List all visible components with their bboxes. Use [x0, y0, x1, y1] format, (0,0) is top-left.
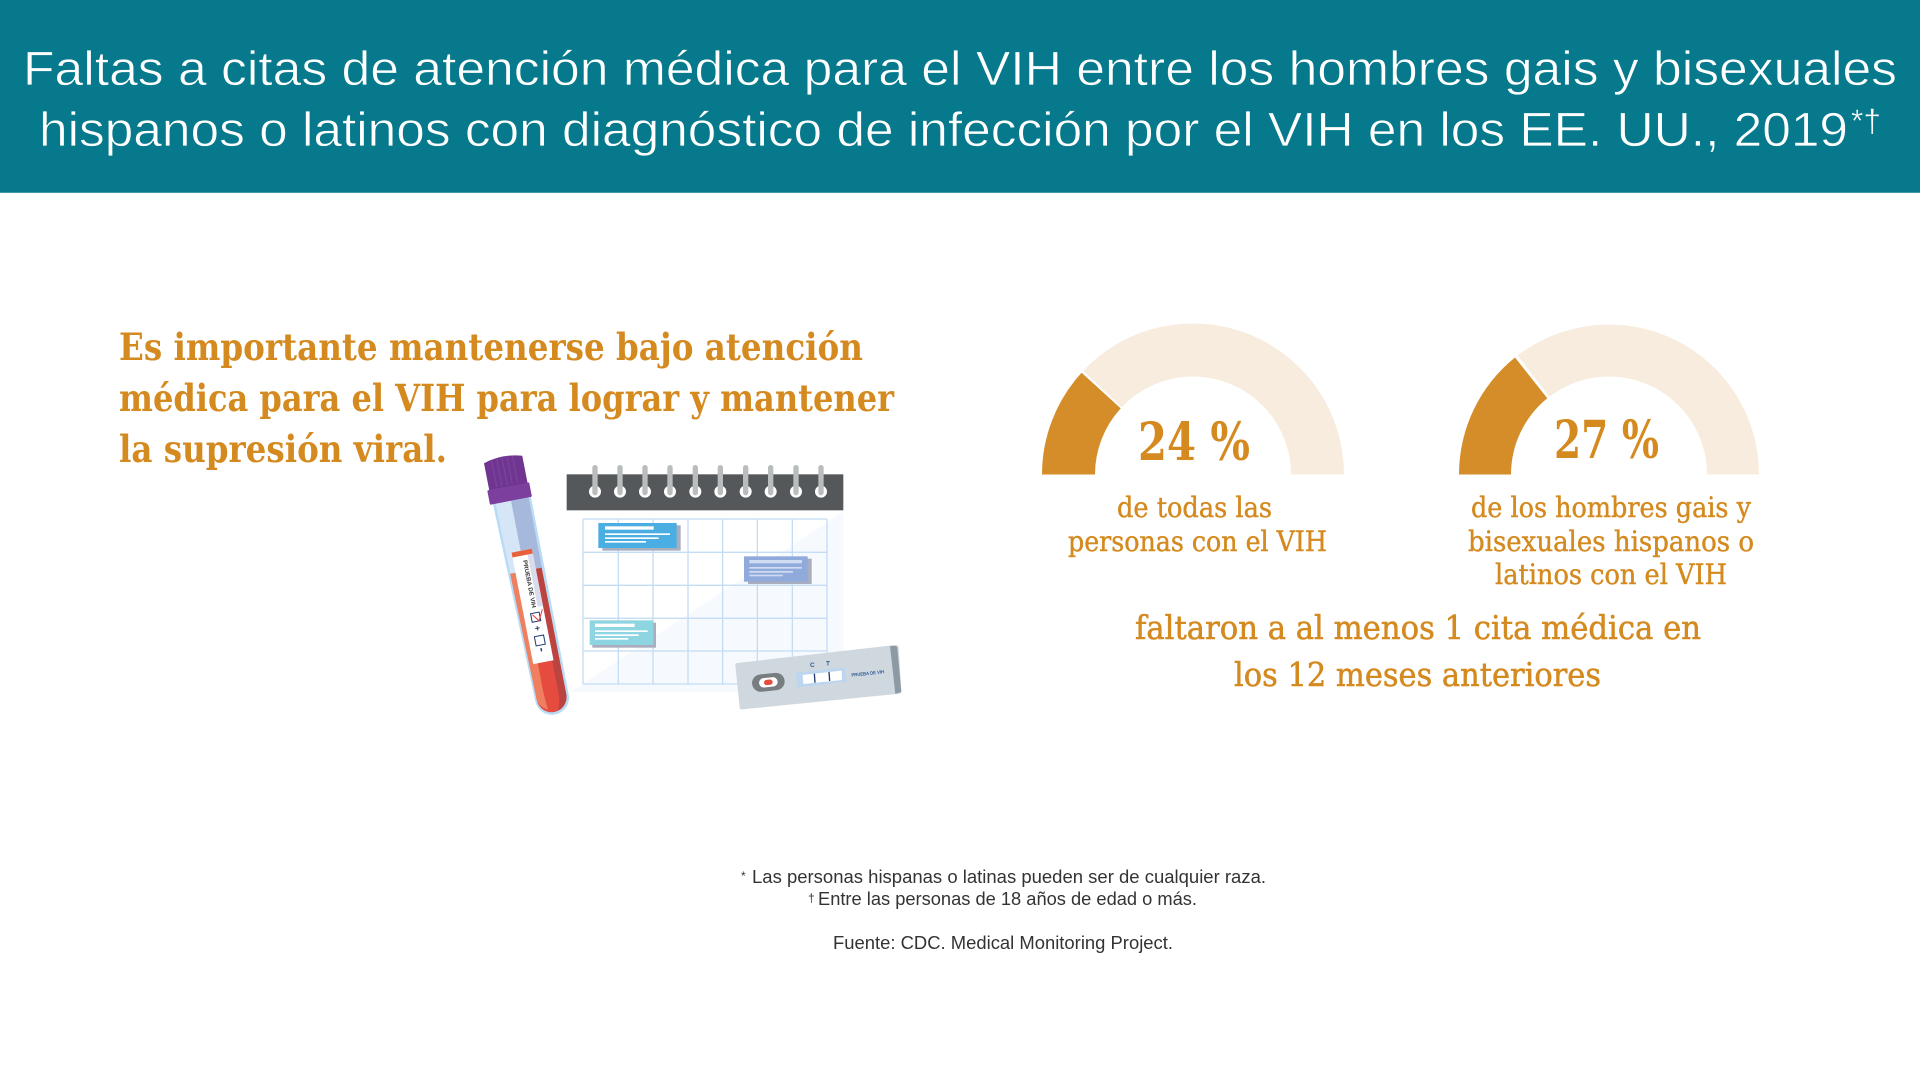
label: gay and bisexual Hispanic or Latino men: de los hombres gais y [1471, 491, 1752, 524]
gauge chart: 24 %: 24 % [1138, 412, 1250, 473]
footnotes and source: Las personas hispanas o latinas pueden ser de cualquier raza. [752, 867, 1266, 887]
title: Faltas a citas de atención médica para el VIH entre los hombres gais y bisexuales [23, 43, 1897, 96]
label: gay and bisexual Hispanic or Latino men: bisexuales hispanos o [1468, 525, 1754, 558]
gauge chart: 24 % [1042, 323, 1344, 474]
gauge chart: 27 %: 27 % [1554, 410, 1659, 471]
statement: missed appointments [1135, 608, 1701, 694]
calendar [567, 468, 843, 692]
heading: importance of care: la supresión viral. [119, 427, 447, 471]
appointment card: periwinkle [744, 556, 812, 584]
statement: missed appointments: los 12 meses anteriores [1234, 655, 1601, 694]
label: all people with HIV: de todas las [1117, 491, 1272, 524]
appointment card: blue [598, 523, 681, 551]
result window [796, 660, 847, 687]
blood [510, 568, 569, 715]
heading: importance of care [119, 325, 894, 471]
title [23, 43, 1897, 157]
rapid test cassette [737, 646, 901, 707]
gauge chart: 27 % [1459, 325, 1759, 474]
calendar rings [589, 468, 827, 498]
footnotes and source: Fuente: CDC. Medical Monitoring Project. [833, 933, 1173, 953]
header banner [0, 0, 1920, 193]
footnotes and source: Entre las personas de 18 años de edad o más. [818, 889, 1197, 909]
result window: T [826, 660, 830, 667]
heading: importance of care: Es importante mantenerse bajo atención [119, 325, 863, 369]
label: all people with HIV: personas con el VIH [1068, 525, 1327, 558]
sample well [751, 672, 785, 693]
illustration: calendar, blood tube and test [481, 452, 901, 719]
label: gay and bisexual Hispanic or Latino men: latinos con el VIH [1495, 558, 1727, 591]
label: all people with HIV [1068, 491, 1327, 558]
result window: C [810, 662, 815, 669]
title: hispanos o latinos con diagnóstico de infección por el VIH en los EE. UU., 2019 [39, 104, 1848, 157]
rapid test cassette: PRUEBA DE VIH [851, 669, 885, 678]
heading: importance of care: médica para el VIH para lograr y mantener [119, 376, 894, 420]
statement: missed appointments: faltaron a al menos 1 cita médica en [1135, 608, 1701, 647]
tube label [512, 549, 554, 664]
appointment card: teal [590, 620, 656, 648]
tube label: + [534, 623, 541, 633]
label: gay and bisexual Hispanic or Latino men [1468, 491, 1754, 591]
blood test tube [481, 452, 574, 719]
footnotes and source [741, 867, 1266, 953]
footnotes and source: † [808, 891, 815, 905]
title: *† [1851, 103, 1881, 139]
footnotes and source: * [741, 869, 746, 883]
tube cap [481, 452, 532, 505]
tube label: PRUEBA DE VIH [521, 560, 536, 608]
